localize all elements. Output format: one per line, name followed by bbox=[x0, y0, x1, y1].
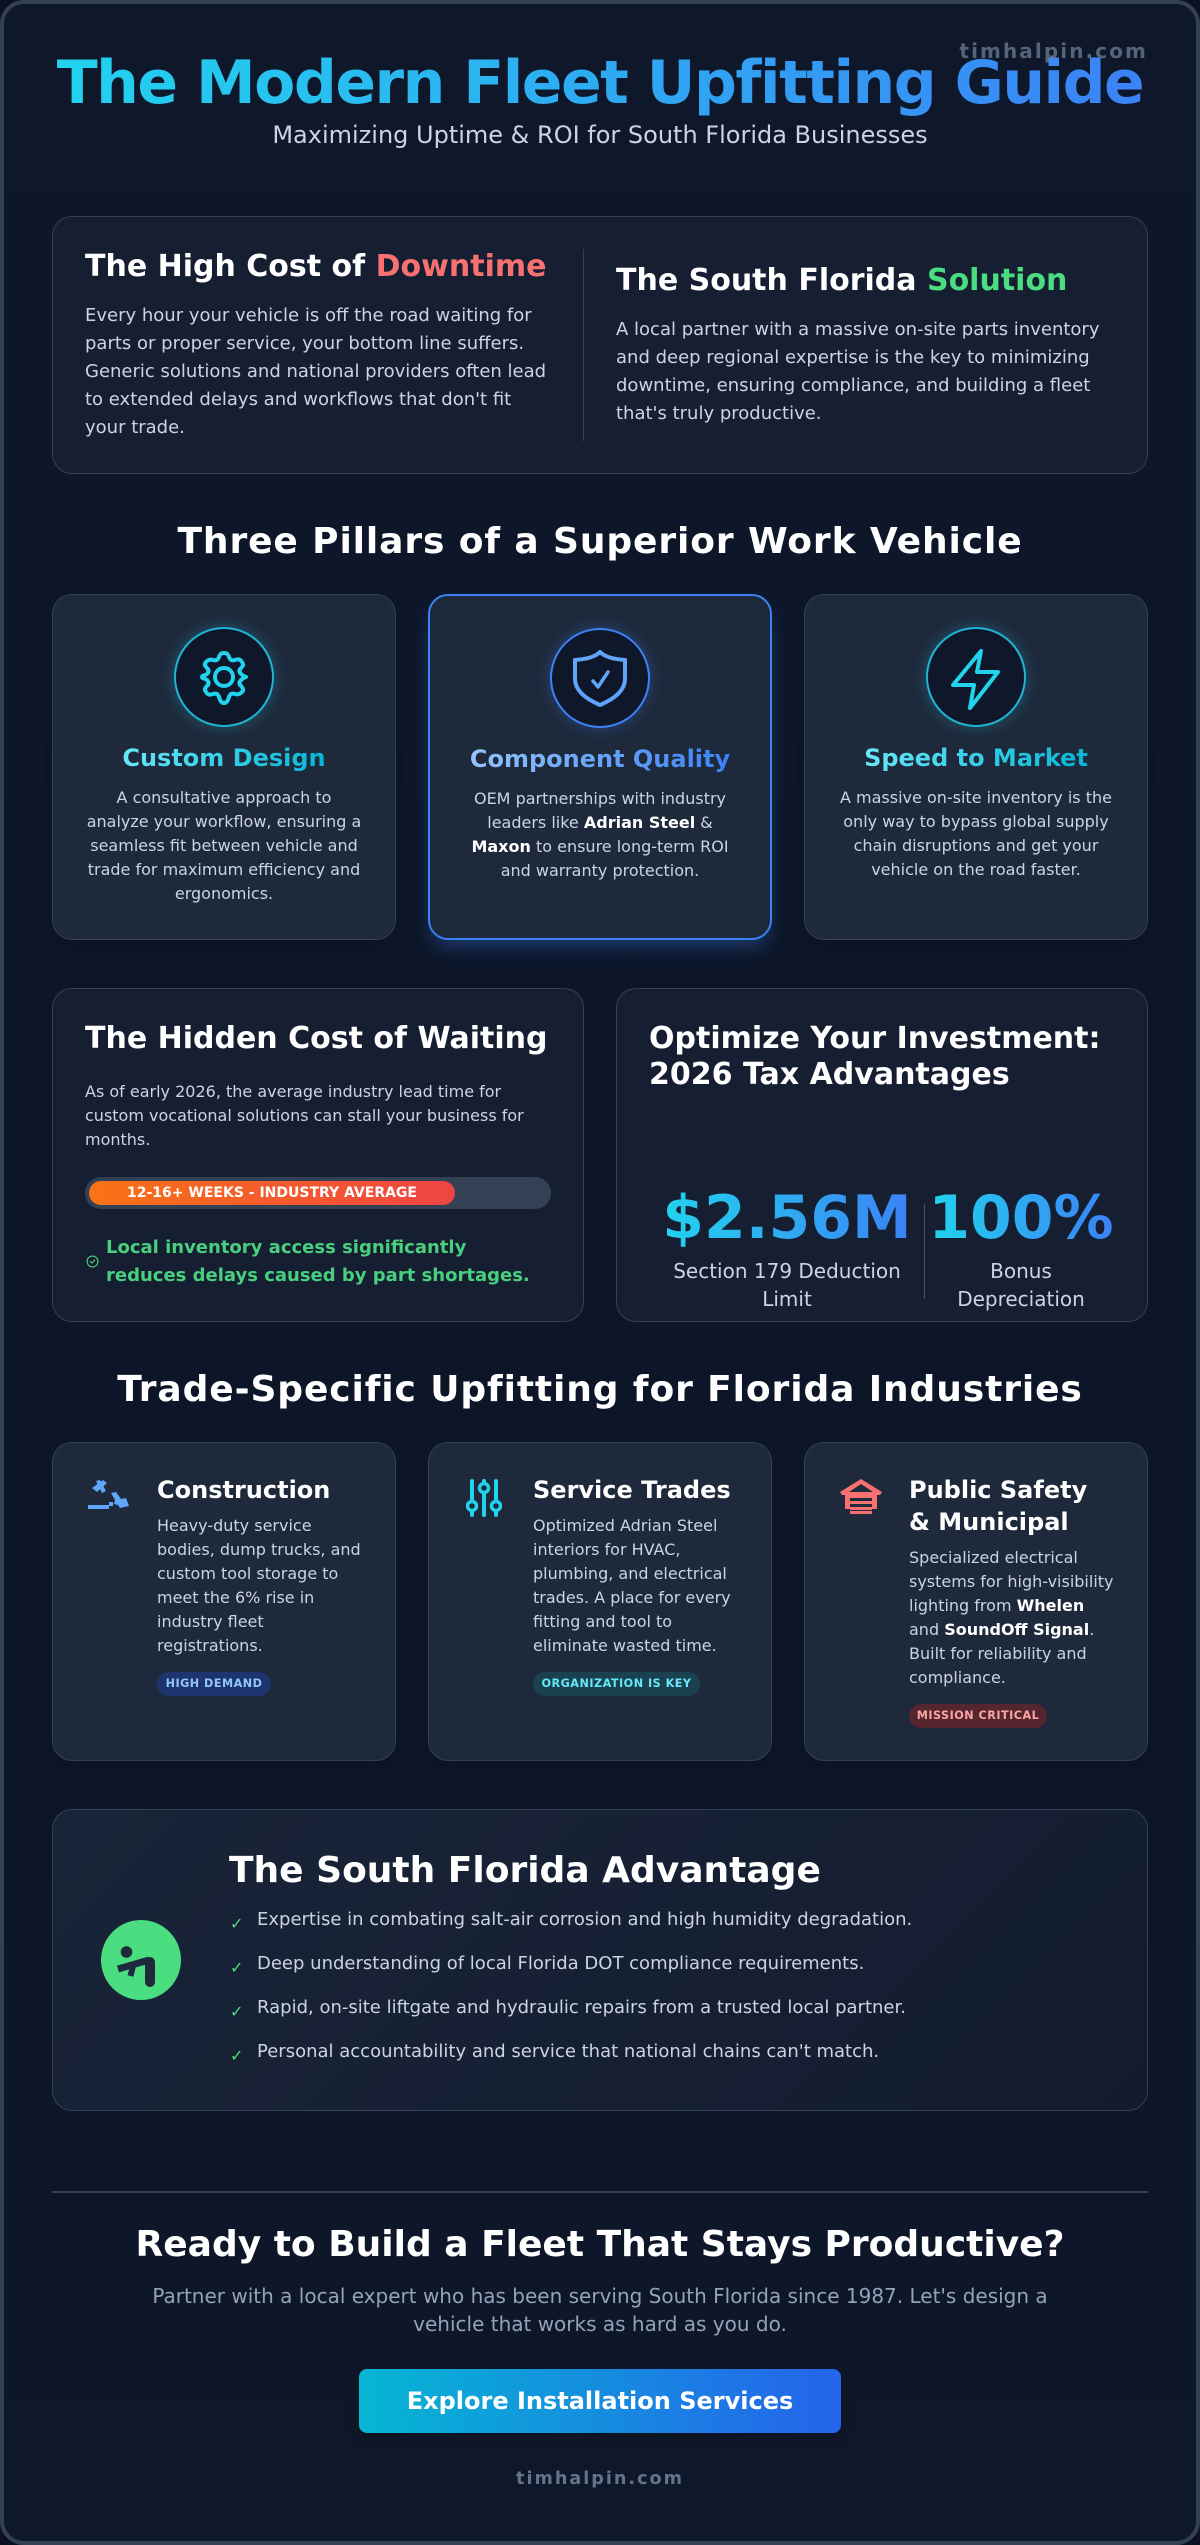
text: solution: and deep regional expertise is the key to minimizing bbox=[616, 347, 1090, 368]
title: component quality: Component Quality bbox=[470, 745, 730, 773]
title: speed to market: Speed to Market bbox=[864, 744, 1088, 772]
text: downtime: your trade. bbox=[85, 417, 185, 438]
text: public safety: systems for high-visibility bbox=[909, 1572, 1114, 1591]
text: construction: Heavy-duty service bbox=[157, 1516, 312, 1535]
text: custom design: analyze your workflow, ensuring a bbox=[87, 812, 361, 831]
text: custom design: A consultative approach to bbox=[117, 788, 331, 807]
heading: optimize investment: Optimize Your Investment: bbox=[649, 1021, 1100, 1056]
heading: three pillars: Three Pillars of a Superior Work Vehicle bbox=[177, 521, 1023, 562]
text: service trades bbox=[533, 1516, 731, 1655]
text: service trades: eliminate wasted time. bbox=[533, 1636, 717, 1655]
label: section 179: Limit bbox=[762, 1287, 812, 1311]
bar fill: 12-16 weeks bbox=[89, 1181, 455, 1205]
title: service trades: Service Trades bbox=[533, 1476, 731, 1504]
label: bonus depreciation: Depreciation bbox=[957, 1287, 1085, 1311]
text: construction bbox=[157, 1516, 361, 1655]
text: call to action: vehicle that works as hard as you do. bbox=[413, 2312, 787, 2336]
item: accountability: ✓ bbox=[230, 2046, 243, 2065]
panel: service trades bbox=[428, 1442, 772, 1761]
text: solution bbox=[616, 319, 1099, 424]
list: advantages bbox=[230, 1909, 912, 2065]
text: call to action: Partner with a local expert who has been serving South Florida since 1987. Let's design a bbox=[152, 2284, 1048, 2308]
text: lead time: months. bbox=[85, 1130, 150, 1149]
text: construction: registrations. bbox=[157, 1636, 263, 1655]
icon: lightning bolt bbox=[926, 627, 1026, 727]
text: public safety: Specialized electrical bbox=[909, 1548, 1078, 1567]
text: construction: bodies, dump trucks, and bbox=[157, 1540, 361, 1559]
heading: trade-specific: Trade-Specific Upfitting for Florida Industries bbox=[117, 1369, 1083, 1410]
callout: local inventory: Local inventory access significantly bbox=[106, 1237, 466, 1258]
callout: local inventory: reduces delays caused by part shortages. bbox=[106, 1265, 530, 1286]
text: public safety: compliance. bbox=[909, 1668, 1006, 1687]
text: lead time bbox=[85, 1082, 524, 1149]
icon: person in green circle bbox=[101, 1920, 181, 2000]
title: The Modern Fleet Upfitting Guide bbox=[57, 48, 1143, 118]
item: compliance: Deep understanding of local Florida DOT compliance requirements. bbox=[257, 1953, 864, 1974]
heading: south florida solution: The South Florida Solution bbox=[616, 263, 1067, 298]
divider bbox=[924, 1204, 925, 1299]
stat: section 179 bbox=[662, 1183, 912, 1311]
text: public safety: lighting from Whelen bbox=[909, 1596, 1084, 1615]
panel: speed to market bbox=[804, 594, 1148, 940]
text: custom design: ergonomics. bbox=[175, 884, 273, 903]
item: compliance: ✓ bbox=[230, 1958, 243, 1977]
icon: gear bbox=[174, 627, 274, 727]
text: custom design: seamless fit between vehicle and bbox=[90, 836, 358, 855]
watermark top: timhalpin.com bbox=[959, 39, 1148, 63]
value: 2.56M: $2.56M bbox=[662, 1183, 912, 1253]
heading: high cost of downtime: The High Cost of Downtime bbox=[85, 249, 546, 284]
text: component quality: Maxon to ensure long-term ROI bbox=[471, 837, 729, 856]
text: custom design bbox=[87, 788, 361, 903]
text: downtime: Generic solutions and national providers often lead bbox=[85, 361, 546, 382]
heading: call to action: Ready to Build a Fleet That Stays Productive? bbox=[136, 2224, 1064, 2265]
text: call to action bbox=[152, 2284, 1048, 2336]
text: service trades: fitting and tool to bbox=[533, 1612, 672, 1631]
panel: hidden cost of waiting bbox=[52, 988, 584, 1322]
text: service trades: plumbing, and electrical bbox=[533, 1564, 727, 1583]
text: solution: A local partner with a massive on-site parts inventory bbox=[616, 319, 1099, 340]
text: construction: custom tool storage to bbox=[157, 1564, 338, 1583]
heading: optimize investment bbox=[649, 1021, 1100, 1092]
badge: high demand bbox=[157, 1672, 271, 1696]
bar fill: 12-16 weeks: 12-16+ WEEKS - INDUSTRY AVERAGE bbox=[127, 1185, 417, 1201]
item: repairs: Rapid, on-site liftgate and hydraulic repairs from a trusted local partner. bbox=[257, 1997, 906, 2018]
heading: hidden cost: The Hidden Cost of Waiting bbox=[85, 1021, 547, 1056]
icon: sliders bbox=[466, 1479, 502, 1517]
text: construction: industry fleet bbox=[157, 1612, 264, 1631]
stat: bonus depreciation bbox=[928, 1183, 1114, 1311]
callout: local inventory bbox=[106, 1237, 530, 1286]
text: speed to market: chain disruptions and get your bbox=[854, 836, 1098, 855]
value: 100%: 100% bbox=[928, 1183, 1114, 1253]
title: public safety: & Municipal bbox=[909, 1508, 1069, 1536]
text: downtime bbox=[85, 305, 546, 438]
badge: mission critical bbox=[909, 1704, 1047, 1728]
text: custom design: trade for maximum efficiency and bbox=[88, 860, 360, 879]
text: lead time: As of early 2026, the average industry lead time for bbox=[85, 1082, 501, 1101]
panel: downtime and solution bbox=[52, 216, 1148, 474]
text: service trades: interiors for HVAC, bbox=[533, 1540, 680, 1559]
text: speed to market: only way to bypass global supply bbox=[843, 812, 1109, 831]
text: construction: meet the 6% rise in bbox=[157, 1588, 314, 1607]
text: speed to market: vehicle on the road faster. bbox=[871, 860, 1081, 879]
text: speed to market bbox=[840, 788, 1112, 879]
item: corrosion: Expertise in combating salt-air corrosion and high humidity degradation. bbox=[257, 1909, 912, 1930]
text: component quality bbox=[471, 789, 729, 880]
text: downtime: Every hour your vehicle is off the road waiting for bbox=[85, 305, 532, 326]
item: accountability: Personal accountability and service that national chains can't match. bbox=[257, 2041, 879, 2062]
text: component quality: OEM partnerships with industry bbox=[474, 789, 726, 808]
text: solution: that's truly productive. bbox=[616, 403, 822, 424]
label: section 179: Section 179 Deduction bbox=[673, 1259, 901, 1283]
title: public safety: Public Safety bbox=[909, 1476, 1087, 1504]
button: explore installation services: Explore Installation Services bbox=[407, 2387, 793, 2415]
text: component quality: leaders like Adrian Steel & bbox=[487, 813, 713, 832]
panel: public safety and municipal bbox=[804, 1442, 1148, 1761]
badge: organization is key: ORGANIZATION IS KEY bbox=[542, 1677, 691, 1690]
icon: construction tools bbox=[88, 1480, 129, 1509]
panel: component quality bbox=[428, 594, 772, 940]
divider bbox=[583, 249, 584, 441]
text: speed to market: A massive on-site inventory is the bbox=[840, 788, 1112, 807]
label: section 179 bbox=[673, 1259, 901, 1311]
heading: advantage: The South Florida Advantage bbox=[229, 1850, 821, 1891]
panel: south florida advantage bbox=[52, 1809, 1148, 2111]
badge: high demand: HIGH DEMAND bbox=[166, 1677, 262, 1690]
label: bonus depreciation bbox=[957, 1259, 1085, 1311]
item: corrosion: ✓ bbox=[230, 1914, 243, 1933]
heading: optimize investment: 2026 Tax Advantages bbox=[649, 1057, 1010, 1092]
text: downtime: to extended delays and workflows that don't fit bbox=[85, 389, 511, 410]
panel: construction bbox=[52, 1442, 396, 1761]
text: public safety: and SoundOff Signal. bbox=[909, 1620, 1094, 1639]
text: service trades: Optimized Adrian Steel bbox=[533, 1516, 717, 1535]
item: repairs: ✓ bbox=[230, 2002, 243, 2021]
panel: tax advantages bbox=[616, 988, 1148, 1322]
title: custom design: Custom Design bbox=[122, 744, 326, 772]
footer watermark: timhalpin.com bbox=[516, 2469, 684, 2489]
badge: mission critical: MISSION CRITICAL bbox=[917, 1709, 1039, 1722]
text: downtime: parts or proper service, your bottom line suffers. bbox=[85, 333, 524, 354]
text: solution: downtime, ensuring compliance, and building a fleet bbox=[616, 375, 1090, 396]
label: bonus depreciation: Bonus bbox=[990, 1259, 1052, 1283]
text: lead time: custom vocational solutions can stall your business for bbox=[85, 1106, 524, 1125]
icon: station garage bbox=[840, 1479, 882, 1514]
subtitle: Maximizing Uptime & ROI for South Florida Businesses bbox=[272, 121, 928, 149]
text: component quality: and warranty protection. bbox=[501, 861, 699, 880]
text: public safety: Built for reliability and bbox=[909, 1644, 1087, 1663]
title: public safety bbox=[909, 1476, 1087, 1536]
icon: check circle bbox=[86, 1256, 98, 1268]
button: explore installation services bbox=[359, 2369, 841, 2433]
panel: custom design bbox=[52, 594, 396, 940]
badge: organization is key bbox=[533, 1672, 700, 1696]
text: public safety bbox=[909, 1548, 1114, 1687]
progress bar bbox=[85, 1177, 551, 1209]
icon: shield check bbox=[550, 628, 650, 728]
text: service trades: trades. A place for every bbox=[533, 1588, 731, 1607]
title: construction: Construction bbox=[157, 1476, 330, 1504]
